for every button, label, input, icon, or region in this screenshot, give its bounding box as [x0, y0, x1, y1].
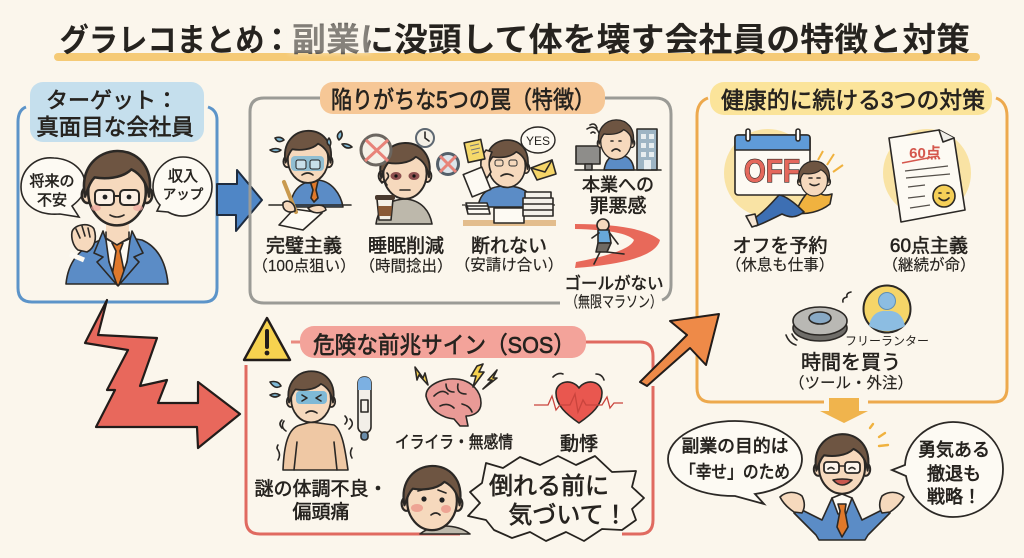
panel: countermeasures	[697, 82, 1007, 402]
label: buy time: 時間を買う	[801, 351, 901, 374]
icon: thermometer	[358, 377, 371, 440]
icon: calendar with resting person	[724, 129, 843, 227]
trap labels: ゴールがない	[564, 273, 664, 293]
sign: physical illness: 謎の体調不良・	[254, 478, 388, 500]
icon: 60 percent document	[883, 129, 971, 222]
trap labels: （安請け合い）	[455, 256, 563, 274]
bubble: future anxiety: 不安	[37, 192, 67, 209]
panel: warning signs	[244, 318, 653, 541]
countermeasure labels: （休息も仕事）	[726, 256, 834, 274]
bubble: purpose is happiness	[668, 421, 802, 504]
bubble: brave withdrawal: 戦略！	[927, 487, 981, 507]
trap labels: 断れない	[471, 235, 547, 257]
person: target office worker	[66, 151, 168, 286]
trap 3: cannot refuse	[462, 127, 556, 226]
heading: target	[30, 82, 204, 142]
countermeasure labels: オフを予約	[732, 235, 828, 257]
bubble: future anxiety: 将来の	[29, 173, 75, 190]
speech bubble: YES: YES	[526, 134, 550, 148]
arrow: countermeasures to conclusion	[820, 398, 868, 423]
trap labels: （時間捻出）	[359, 257, 453, 275]
bubble: brave withdrawal: 撤退も	[927, 464, 981, 484]
icon: warning triangle	[244, 318, 300, 360]
label: buy time	[789, 351, 913, 392]
heading: warning signs: 危険な前兆サイン（SOS）	[313, 332, 575, 358]
callout: notice before collapsing	[468, 456, 644, 541]
panel: traps	[250, 82, 671, 311]
sign: physical illness: 偏頭痛	[292, 501, 350, 523]
countermeasure labels: 60点主義	[890, 235, 968, 257]
trap labels: 完璧主義	[266, 235, 342, 257]
label: buy time: （ツール・外注）	[789, 374, 913, 392]
trap 4: guilt	[575, 120, 661, 170]
trap labels: （100点狙い）	[252, 257, 356, 275]
bubble: income up: アップ	[163, 187, 204, 202]
heading: target: ターゲット：	[46, 88, 178, 113]
trap labels	[252, 235, 664, 311]
arrow: target to traps	[217, 170, 262, 231]
bubble: brave withdrawal: 勇気ある	[918, 440, 990, 460]
trap 4 label: 本業への	[582, 175, 654, 195]
sign: palpitations, heart: 動悸	[560, 433, 598, 455]
bubble: income up	[153, 157, 212, 216]
countermeasure labels: （継続が命）	[882, 256, 976, 274]
person: smiling advisor	[780, 424, 904, 540]
sign: irritation, brain: イライラ・無感情	[395, 433, 513, 452]
bubble: brave withdrawal	[892, 422, 1003, 517]
trap 4 label	[582, 175, 654, 217]
icon: robot vacuum	[786, 292, 851, 345]
zigzag red arrow: to warning signs	[85, 300, 240, 448]
countermeasure labels	[726, 235, 976, 274]
bubble: purpose is happiness: 「幸せ」のため	[680, 462, 790, 482]
trap 1: perfectionism	[269, 131, 352, 230]
icon: freelancer	[864, 286, 910, 332]
person: worried man	[402, 466, 470, 534]
title: ：	[261, 22, 293, 58]
heading: traps: 陥りがちな5つの罠（特徴）	[331, 87, 595, 114]
title: グラレコまとめ	[60, 22, 264, 58]
callout: notice before collapsing: 気づいて！	[508, 502, 628, 529]
heading: target: 真面目な会社員	[36, 115, 194, 140]
callout: notice before collapsing: 倒れる前に	[489, 473, 609, 500]
OFF lettering: OFF	[744, 153, 800, 189]
label: freelancer: フリーランター	[845, 334, 929, 348]
trap 4 label: 罪悪感	[589, 195, 647, 217]
heading: countermeasures: 健康的に続ける3つの対策	[721, 87, 985, 113]
bubble: income up: 収入	[168, 168, 198, 185]
sign: physical illness	[254, 371, 388, 523]
bubble: future anxiety	[21, 158, 85, 217]
trap labels: （無限マラソン）	[566, 293, 662, 311]
bubble: purpose is happiness: 副業の目的は	[682, 436, 788, 456]
title: 副業に没頭して体を壊す会社員の特徴と対策	[292, 21, 970, 58]
arrow: signs to countermeasures	[640, 314, 719, 386]
trap labels: 睡眠削減	[368, 235, 444, 257]
sign: irritation, brain	[395, 364, 513, 452]
sign: palpitations, heart	[534, 373, 623, 455]
trap 5: no goal	[575, 219, 660, 268]
panel: target	[18, 82, 217, 302]
icon: 60 percent document: 60点	[909, 144, 941, 162]
trap 2: sleep reduction	[361, 129, 458, 224]
